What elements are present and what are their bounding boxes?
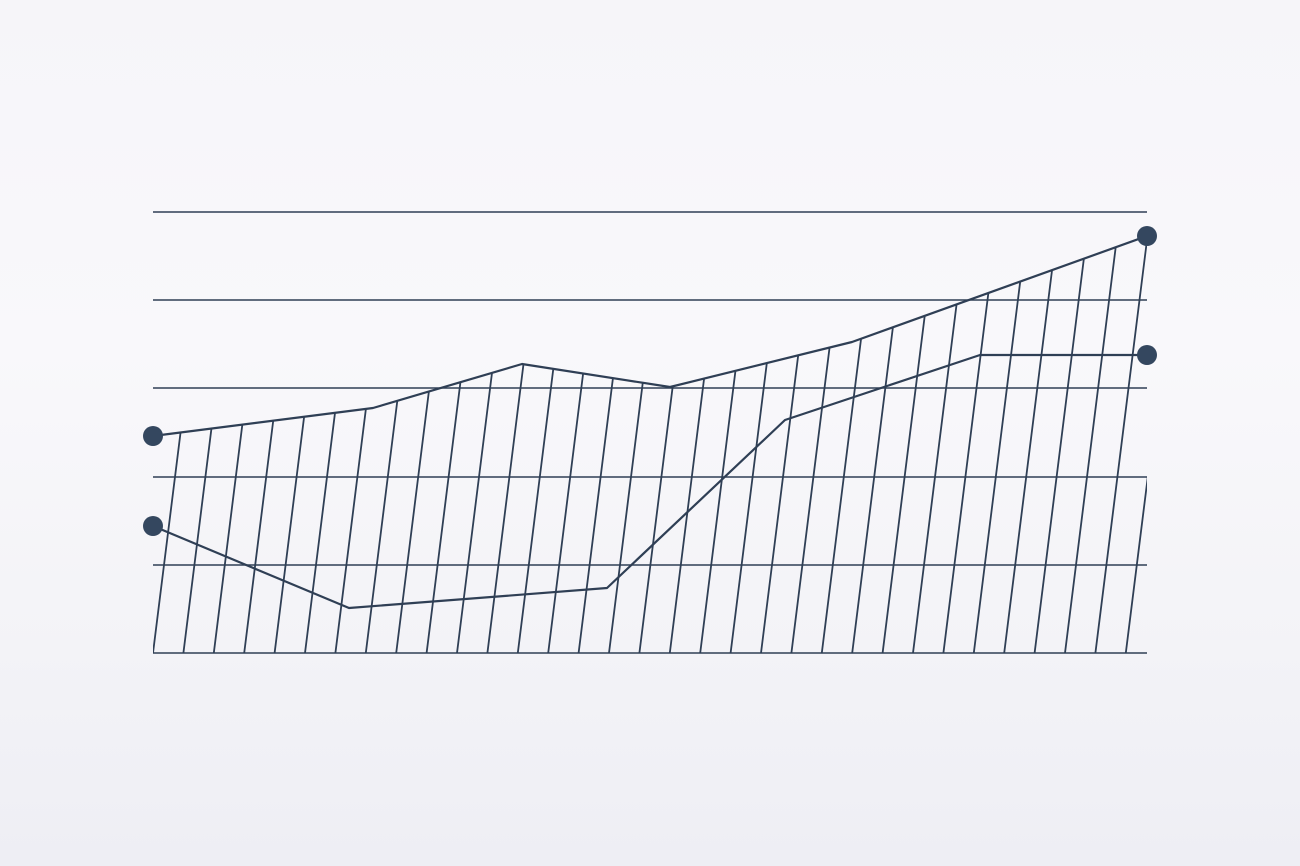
lower data line bbox=[143, 345, 1157, 608]
upper data line bbox=[143, 226, 1157, 446]
line chart bbox=[143, 211, 1157, 654]
hatched area bbox=[153, 246, 1147, 652]
grid lines bbox=[153, 212, 1147, 653]
